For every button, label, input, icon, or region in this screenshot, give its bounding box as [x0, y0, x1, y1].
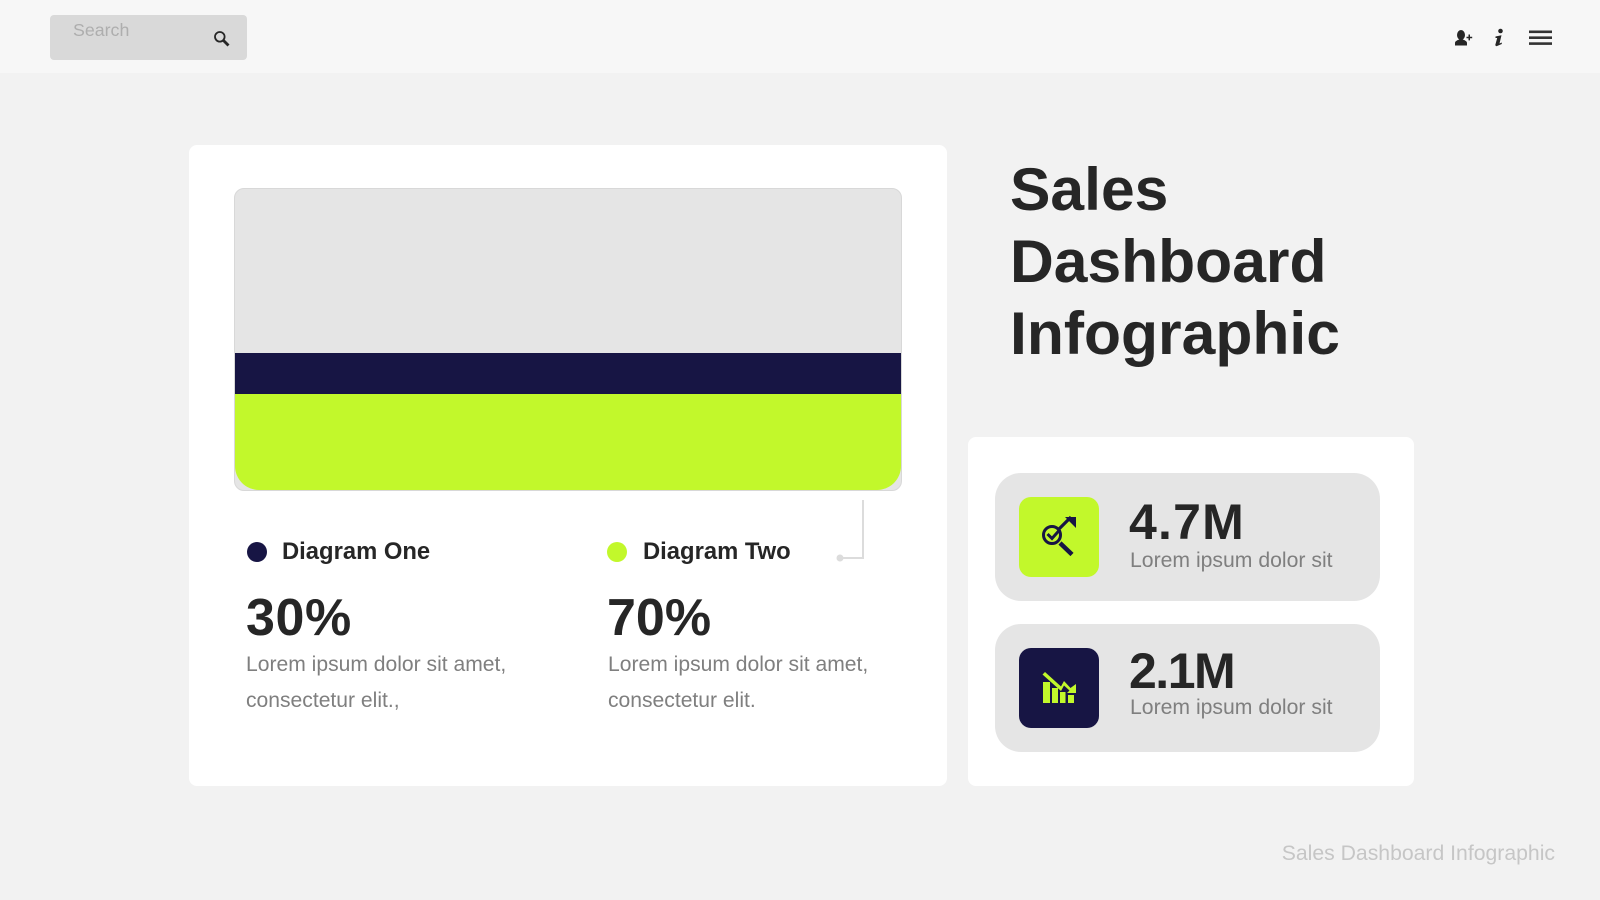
icon: add user [1455, 30, 1472, 46]
caption: Lorem ipsum dolor sit [1130, 696, 1333, 719]
value: 2.1M [1129, 643, 1234, 699]
icon: info [1495, 28, 1503, 46]
icon: magnifier [214, 31, 230, 46]
stat: 30%: 30% [246, 589, 352, 647]
icon: target magnifier [1019, 497, 1099, 577]
description one [246, 653, 506, 712]
footer caption: Sales Dashboard Infographic [1282, 842, 1555, 865]
description two: consectetur elit. [608, 689, 756, 712]
description two [608, 653, 868, 712]
legend dot: lime [607, 542, 627, 562]
metric row: 2.1M [995, 624, 1380, 752]
connector line [836, 500, 864, 562]
description two: Lorem ipsum dolor sit amet, [608, 653, 868, 676]
legend: diagram two [607, 538, 791, 565]
metric row: 4.7M [995, 473, 1380, 601]
caption: Lorem ipsum dolor sit [1130, 549, 1333, 572]
bar segment: diagram one [235, 353, 901, 394]
title: Sales [1010, 155, 1168, 223]
search box [50, 15, 247, 60]
search placeholder: Search [73, 20, 129, 40]
icon: falling chart [1019, 648, 1099, 728]
value: 4.7M [1129, 494, 1245, 550]
title: Dashboard [1010, 227, 1326, 295]
icon: menu [1529, 30, 1552, 45]
title: Infographic [1010, 299, 1340, 367]
legend dot: navy [247, 542, 267, 562]
description one: consectetur elit., [246, 689, 400, 712]
top bar [0, 0, 1600, 73]
panel: diagram card [189, 145, 947, 786]
description one: Lorem ipsum dolor sit amet, [246, 653, 506, 676]
stacked bar chart [234, 188, 902, 491]
bar segment: diagram two [235, 394, 901, 490]
legend label: Diagram Two [643, 538, 791, 565]
legend label: Diagram One [282, 538, 430, 565]
panel: metrics card [968, 437, 1414, 786]
legend: diagram one [247, 538, 430, 565]
stat: 70%: 70% [607, 589, 711, 647]
title [1010, 155, 1340, 367]
